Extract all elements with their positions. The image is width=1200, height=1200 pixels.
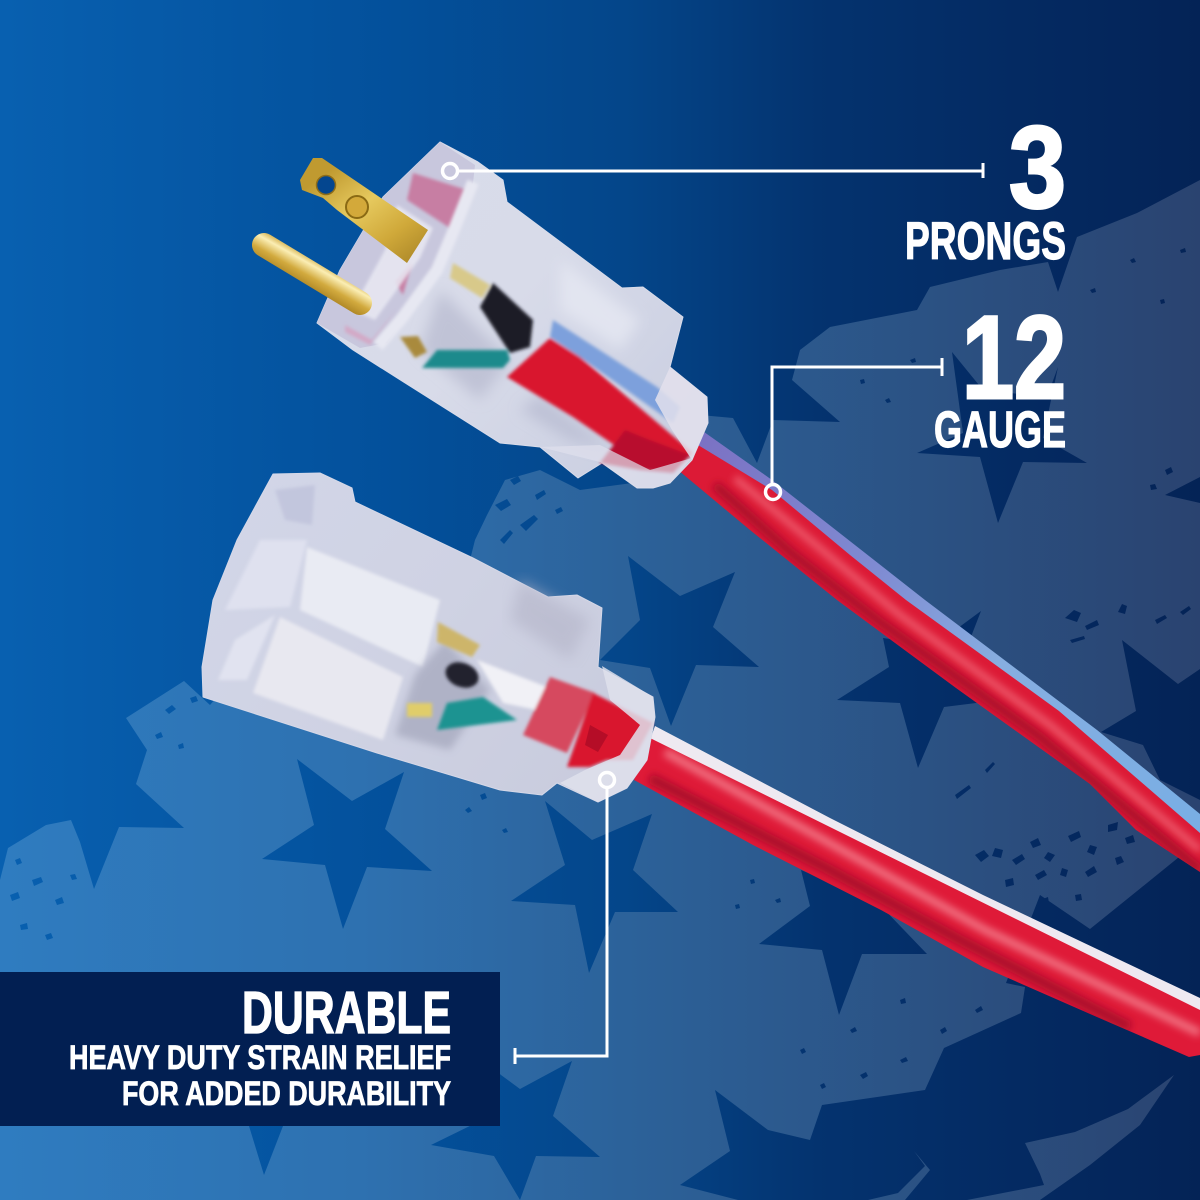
translucent socket housing (202, 473, 655, 802)
text: strain relief: HEAVY DUTY STRAIN RELIEF (69, 1039, 451, 1077)
icon: flat prong with hole (300, 158, 428, 263)
label: 12 gauge (934, 292, 1066, 458)
plug wires (400, 263, 693, 473)
label: 12 gauge: GAUGE (934, 401, 1066, 458)
socket wires (407, 622, 653, 767)
plug collar highlight (655, 367, 708, 460)
socket collar highlight (560, 666, 655, 802)
panel: durable (0, 972, 500, 1126)
plug soft shading (420, 260, 640, 450)
socket strain relief mark (585, 725, 608, 752)
translucent plug housing (317, 142, 708, 488)
socket (202, 473, 655, 802)
callout: durable line (515, 772, 614, 1064)
upper cord (660, 415, 1200, 872)
plug front face (317, 142, 475, 348)
label: 12 gauge: 12 (962, 292, 1066, 424)
plug: three prongs (264, 142, 708, 488)
socket inner shadow (395, 640, 490, 750)
socket front cap (218, 485, 315, 680)
callout: prongs line (442, 163, 983, 178)
callout: gauge line (766, 358, 942, 500)
label: 3 prongs: PRONGS (905, 212, 1066, 271)
text: added durability: FOR ADDED DURABILITY (122, 1075, 451, 1113)
label: 3 prongs (905, 102, 1066, 271)
heading: durable: DURABLE (242, 980, 451, 1046)
callout lines (442, 163, 983, 1064)
icon: round ground prong (264, 245, 360, 303)
lower cord (634, 726, 1200, 1057)
socket white core (253, 547, 440, 740)
label: 3 prongs: 3 (1009, 102, 1066, 232)
